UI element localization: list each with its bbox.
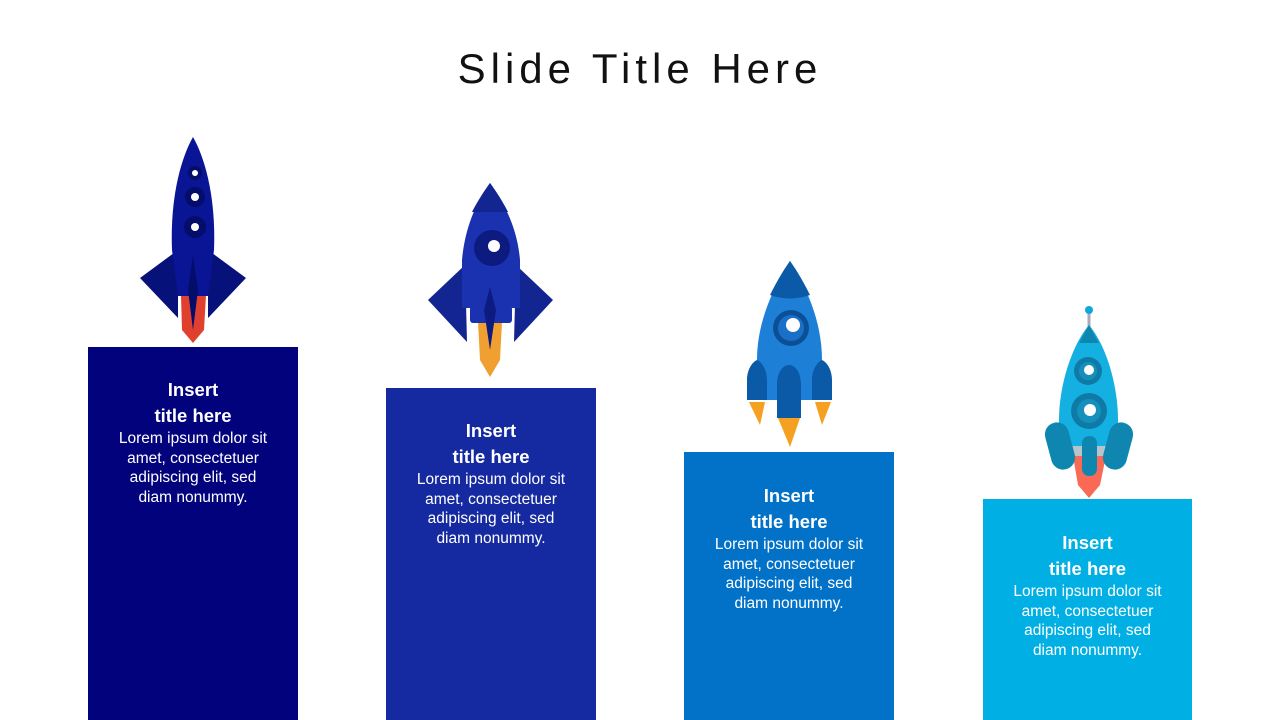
bar 2: Insert: [466, 420, 516, 441]
bar 4: diam nonummy.: [1033, 642, 1142, 658]
bar 1: Lorem ipsum dolor sit: [119, 430, 267, 447]
bar 4: amet, consectetuer: [1022, 602, 1153, 620]
bar 2: title here: [452, 446, 530, 467]
bar 1: amet, consectetuer: [127, 450, 259, 466]
bar 3: [684, 452, 894, 720]
bar 3: diam nonummy.: [734, 594, 844, 612]
bar 1: title here: [154, 405, 232, 426]
icon: rocket 4: [1042, 306, 1136, 498]
bar 4: adipiscing elit, sed: [1024, 622, 1151, 639]
bar 3: Lorem ipsum dolor sit: [715, 536, 863, 553]
bar 4: [983, 499, 1192, 720]
icon: rocket 3: [747, 261, 832, 447]
bar 1: Insert: [168, 379, 218, 400]
bar 2: amet, consectetuer: [425, 490, 557, 508]
bar 4: title here: [1049, 558, 1126, 579]
bar 2: diam nonummy.: [436, 530, 546, 546]
bar 3: Insert: [764, 485, 814, 506]
icon: rocket 1: [140, 137, 246, 343]
bar 2: adipiscing elit, sed: [428, 510, 554, 527]
title: Slide Title Here: [458, 45, 822, 92]
bar 2: Lorem ipsum dolor sit: [417, 471, 565, 488]
bar 3: amet, consectetuer: [723, 556, 855, 572]
bar 4: Insert: [1062, 532, 1113, 553]
bar 2: [386, 388, 596, 720]
bar 1: adipiscing elit, sed: [130, 469, 256, 486]
bar 1: diam nonummy.: [138, 488, 248, 506]
bar 3: title here: [750, 511, 828, 532]
bar 4: Lorem ipsum dolor sit: [1013, 583, 1162, 600]
icon: rocket 2: [428, 183, 553, 377]
bar 1: [88, 347, 298, 720]
bar 3: adipiscing elit, sed: [726, 575, 852, 592]
